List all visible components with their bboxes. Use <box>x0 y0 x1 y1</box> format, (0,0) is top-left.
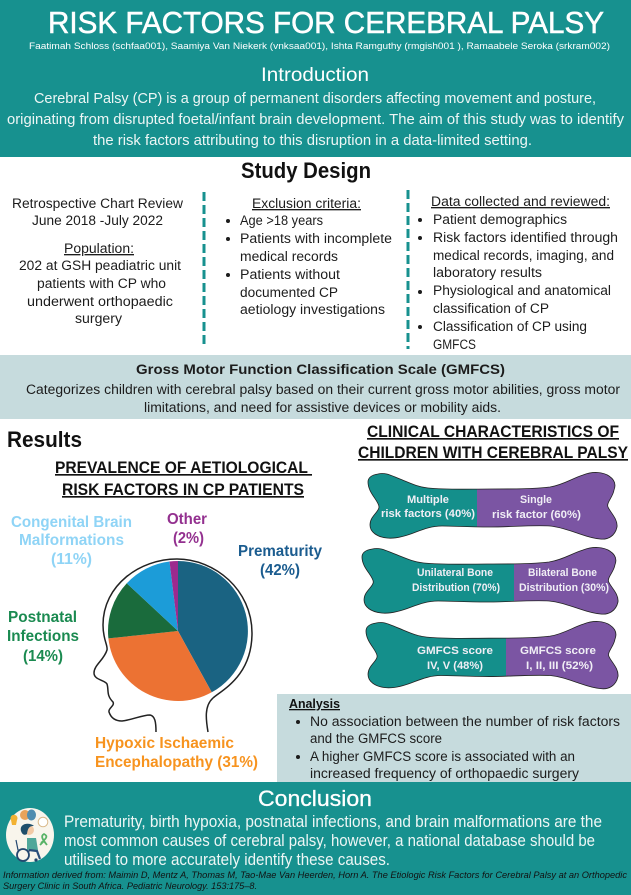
text block: exclusion criteria: documented CP <box>240 285 338 300</box>
label: hypoxic ischaemic encephalopathy <box>95 735 258 771</box>
heading: results: Results <box>7 427 82 452</box>
heading: prevalence of risk factors: PREVALENCE OF AETIOLOGICAL <box>55 459 312 477</box>
text block: study type and population: 202 at GSH peadiatric unit <box>19 258 181 273</box>
label: postnatal infections: (14%) <box>23 648 63 665</box>
chart: bone GMFCS score: GMFCS score <box>520 645 596 657</box>
text block: study type and population: June 2018 -July 2022 <box>32 213 163 228</box>
conclusion text: Prematurity, birth hypoxia, postnatal infections, and brain malformations are the <box>64 813 602 831</box>
label: postnatal infections <box>7 609 79 665</box>
title: RISK FACTORS FOR CEREBRAL PALSY <box>48 5 604 40</box>
chart: bone distribution: Unilateral Bone <box>417 567 493 579</box>
label: hypoxic ischaemic encephalopathy: Encephalopathy (31%) <box>95 754 258 771</box>
text block: data collected: Data collected and reviewed: <box>431 194 610 209</box>
text block: study type and population: underwent orthopaedic <box>27 294 173 309</box>
introduction text: the risk factors attributing to this disruption in a data-limited setting. <box>93 133 532 149</box>
text block: data collected: laboratory results <box>433 265 542 280</box>
analysis findings: No association between the number of risk factors <box>310 714 620 729</box>
conclusion text <box>64 813 602 869</box>
heading: prevalence of risk factors <box>55 459 312 499</box>
introduction text: Cerebral Palsy (CP) is a group of permanent disorders affecting movement and posture, <box>34 91 596 107</box>
chart: bone GMFCS score: IV, V (48%) <box>427 660 483 672</box>
label: postnatal infections: Infections <box>7 628 79 645</box>
conclusion heading: Conclusion <box>258 786 372 811</box>
text block: data collected <box>418 194 618 352</box>
text block: data collected: Patient demographics <box>433 212 567 227</box>
analysis findings: and the GMFCS score <box>310 731 442 746</box>
label: congenital brain malformations: (11%) <box>51 551 92 568</box>
text block: study type and population: Retrospective Chart Review <box>12 196 183 211</box>
label: congenital brain malformations: Malformations <box>19 532 124 549</box>
text block: data collected: Risk factors identified through <box>433 230 618 245</box>
heading: clinical characteristics: CLINICAL CHARACTERISTICS OF <box>367 423 619 441</box>
text block: data collected: classification of CP <box>433 301 549 316</box>
authors: Faatimah Schloss (schfaa001), Saamiya Van Niekerk (vnksaa001), Ishta Ramguthy (rmgish001 ), Ramaabele Seroka (srkram002) <box>29 41 610 52</box>
text block: exclusion criteria: Patients without <box>240 267 340 282</box>
text block: study type and population: patients with CP who <box>37 276 166 291</box>
text block: exclusion criteria: Patients with incomplete <box>240 231 392 246</box>
GMFCS heading: Gross Motor Function Classification Scale (GMFCS) <box>136 361 505 377</box>
chart: bone GMFCS score <box>366 621 618 690</box>
text block: exclusion criteria: aetiology investigations <box>240 302 385 317</box>
icon: child in wheelchair <box>6 808 54 862</box>
label: congenital brain malformations <box>11 514 132 568</box>
chart: bone risk factor count: risk factors (40%) <box>381 508 475 520</box>
chart: bone GMFCS score: I, II, III (52%) <box>526 660 593 672</box>
analysis heading: Analysis <box>289 696 340 711</box>
label: prematurity: Prematurity <box>238 543 322 560</box>
citation <box>3 870 627 891</box>
panel: analysis <box>277 694 631 783</box>
analysis findings <box>296 714 620 781</box>
heading: clinical characteristics <box>358 423 628 462</box>
GMFCS description <box>26 382 621 415</box>
label: prematurity: (42%) <box>260 562 300 579</box>
text block: exclusion criteria: Age >18 years <box>240 213 323 228</box>
chart: bone risk factor count <box>368 472 618 540</box>
chart: bone distribution <box>362 547 618 614</box>
chart: head pie chart <box>94 559 252 732</box>
citation: Surgery Clinic in South Africa. Pediatric Neurology. 153:175–8. <box>3 881 257 891</box>
text block: exclusion criteria: Exclusion criteria: <box>252 196 361 211</box>
panel: GMFCS definition <box>0 355 631 419</box>
citation: Information derived from: Maimin D, Mentz A, Thomas M, Tao-Mae Van Heerden, Horn A. The Etiologic Risk Factors for Cerebral Palsy at an Orthopedic <box>3 870 627 880</box>
text block: data collected: Classification of CP using <box>433 319 587 334</box>
label: other <box>167 511 207 547</box>
analysis findings: increased frequency of orthopaedic surgery <box>310 766 579 781</box>
heading: prevalence of risk factors: RISK FACTORS IN CP PATIENTS <box>62 481 304 499</box>
text block: data collected: GMFCS <box>433 337 476 352</box>
text block: data collected: Physiological and anatomical <box>433 283 611 298</box>
text block: data collected: medical records, imaging, and <box>433 248 614 263</box>
chart: bone distribution: Distribution (30%) <box>519 582 609 594</box>
chart: bone GMFCS score: GMFCS score <box>417 645 493 657</box>
chart: bone distribution: Distribution (70%) <box>412 582 500 594</box>
label: prematurity <box>238 543 322 579</box>
text block: study type and population: Population: <box>64 241 134 256</box>
icon: head outline <box>94 559 252 732</box>
label: hypoxic ischaemic encephalopathy: Hypoxic Ischaemic <box>95 735 234 752</box>
GMFCS description: limitations, and need for assistive devices or mobility aids. <box>144 400 501 415</box>
chart: bone risk factor count: Single <box>520 494 552 506</box>
analysis findings: A higher GMFCS score is associated with an <box>310 749 575 764</box>
label: congenital brain malformations: Congenital Brain <box>11 514 132 531</box>
label: other: (2%) <box>173 530 204 547</box>
chart: bone risk factor count: Multiple <box>407 494 449 506</box>
panel: conclusion <box>0 782 631 895</box>
GMFCS description: Categorizes children with cerebral palsy based on their current gross motor abilities, gross motor <box>26 382 621 397</box>
chart: bone risk factor count: risk factor (60%) <box>492 509 581 521</box>
text block: exclusion criteria <box>226 196 392 317</box>
introduction text: originating from disrupted foetal/infant brain development. The aim of this study was to identify <box>7 112 625 128</box>
introduction text <box>7 91 625 149</box>
text block: study type and population: surgery <box>75 311 122 326</box>
conclusion text: utilised to more accurately identify these causes. <box>64 851 390 869</box>
text block: study type and population <box>12 196 183 326</box>
text block: exclusion criteria: medical records <box>240 249 338 264</box>
chart: bone distribution: Bilateral Bone <box>528 567 597 579</box>
panel: header and introduction <box>0 0 631 157</box>
heading: study design: Study Design <box>241 158 371 183</box>
label: other: Other <box>167 511 207 528</box>
label: postnatal infections: Postnatal <box>8 609 77 626</box>
introduction heading: Introduction <box>261 65 369 86</box>
